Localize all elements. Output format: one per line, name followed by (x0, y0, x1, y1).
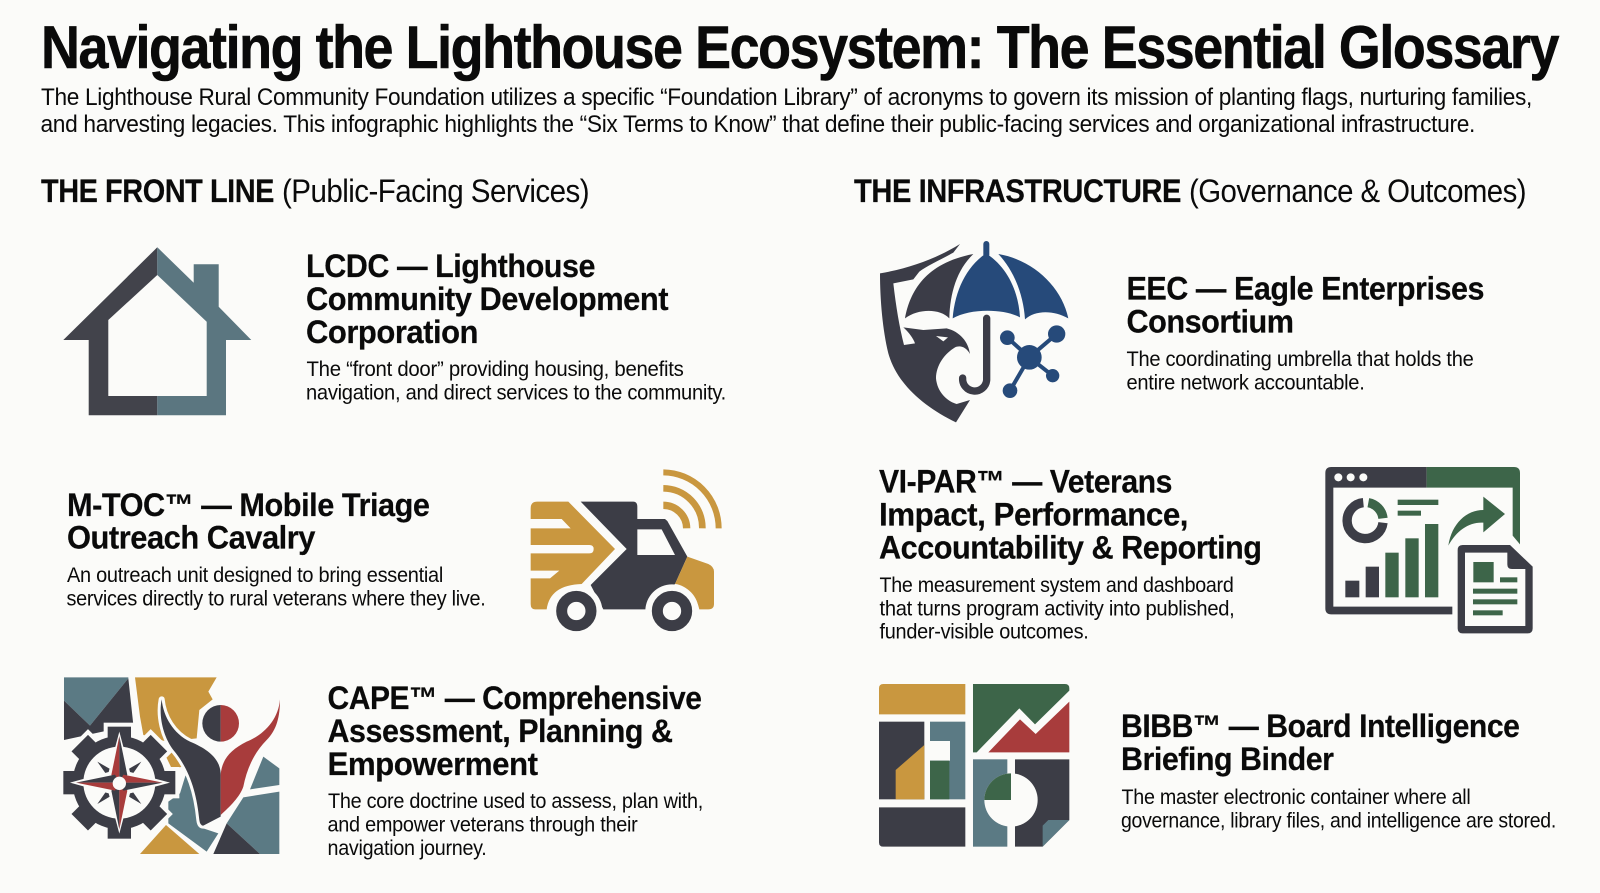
icon: compass gear and figure mosaic (63, 677, 280, 854)
CAPE heading: CAPE (328, 680, 414, 716)
VI-PAR description: The measurement system and dashboard (880, 573, 1234, 597)
LCDC description: The “front door” providing housing, benefits (306, 357, 684, 381)
heading: the front line (41, 173, 589, 209)
heading: the front line: (Public-Facing Services) (282, 173, 589, 209)
VI-PAR description: funder-visible outcomes. (880, 620, 1088, 644)
heading: the infrastructure: THE INFRASTRUCTURE (854, 173, 1181, 209)
M-TOC heading: ™ (165, 489, 193, 522)
icon: binder mosaic (879, 684, 1069, 847)
BIBB description: The master electronic container where all (1122, 785, 1470, 809)
EEC description: entire network accountable. (1126, 370, 1364, 394)
panel: VI-PAR (879, 464, 1533, 644)
CAPE description (328, 789, 703, 860)
CAPE heading (328, 680, 702, 782)
VI-PAR heading (879, 464, 1262, 566)
M-TOC description: services directly to rural veterans where they live. (66, 586, 486, 610)
CAPE heading: ™ (409, 682, 437, 715)
LCDC heading (306, 248, 669, 350)
BIBB heading: — Board Intelligence (1221, 708, 1520, 744)
LCDC heading: Corporation (306, 314, 478, 350)
EEC description: The coordinating umbrella that holds the (1126, 347, 1474, 371)
panel: CAPE (63, 677, 703, 860)
M-TOC heading: Outreach Cavalry (67, 520, 316, 556)
panel: LCDC (63, 247, 726, 415)
CAPE description: and empower veterans through their (328, 812, 638, 836)
M-TOC heading (67, 487, 430, 556)
VI-PAR heading: Accountability & Reporting (879, 530, 1262, 566)
M-TOC description: An outreach unit designed to bring essential (67, 563, 443, 587)
BIBB description: governance, library files, and intelligence are stored. (1121, 808, 1556, 832)
VI-PAR description: that turns program activity into published, (880, 596, 1234, 620)
LCDC description: navigation, and direct services to the community. (306, 380, 726, 404)
intro text: The Lighthouse Rural Community Foundation utilizes a specific “Foundation Library” of acronyms to govern its mission of planting flags, nurturing families, (41, 84, 1532, 111)
panel: BIBB (879, 684, 1556, 847)
CAPE description: The core doctrine used to assess, plan with, (328, 789, 703, 813)
EEC heading: EEC — Eagle Enterprises (1126, 270, 1484, 306)
M-TOC heading: M-TOC (67, 487, 169, 523)
BIBB description (1121, 785, 1556, 832)
VI-PAR heading: ™ (976, 466, 1004, 498)
M-TOC description (66, 563, 486, 610)
LCDC heading: LCDC — Lighthouse (306, 248, 595, 284)
EEC description (1126, 347, 1474, 394)
VI-PAR heading: VI-PAR (879, 464, 982, 500)
BIBB heading: ™ (1193, 710, 1221, 743)
VI-PAR description (880, 573, 1234, 644)
CAPE heading: Assessment, Planning & (328, 713, 673, 749)
CAPE heading: Empowerment (328, 746, 538, 782)
M-TOC heading: — Mobile Triage (193, 487, 430, 523)
intro text: and harvesting legacies. This infographic highlights the “Six Terms to Know” that define their public-facing services and organizational infrastructure. (40, 111, 1475, 138)
VI-PAR heading: — Veterans (1004, 464, 1172, 500)
CAPE description: navigation journey. (328, 836, 486, 860)
icon: shield eagle umbrella network (880, 241, 1068, 422)
LCDC description (306, 357, 726, 404)
heading: the front line: THE FRONT LINE (41, 173, 274, 209)
BIBB heading: BIBB (1121, 708, 1197, 744)
CAPE heading: — Comprehensive (437, 680, 702, 716)
VI-PAR heading: Impact, Performance, (879, 496, 1188, 532)
LCDC heading: Community Development (306, 281, 669, 317)
heading: the infrastructure: (Governance & Outcomes) (1189, 173, 1526, 209)
BIBB heading (1121, 708, 1520, 777)
panel: M-TOC (66, 472, 719, 638)
icon: dashboard and report (1325, 467, 1533, 633)
icon: house (63, 247, 251, 415)
panel: EEC (880, 241, 1484, 422)
EEC heading (1126, 270, 1484, 340)
EEC heading: Consortium (1126, 304, 1294, 340)
icon: mobile outreach truck (531, 472, 719, 638)
BIBB heading: Briefing Binder (1121, 741, 1334, 777)
heading: the infrastructure (854, 173, 1526, 209)
intro text (40, 84, 1532, 138)
